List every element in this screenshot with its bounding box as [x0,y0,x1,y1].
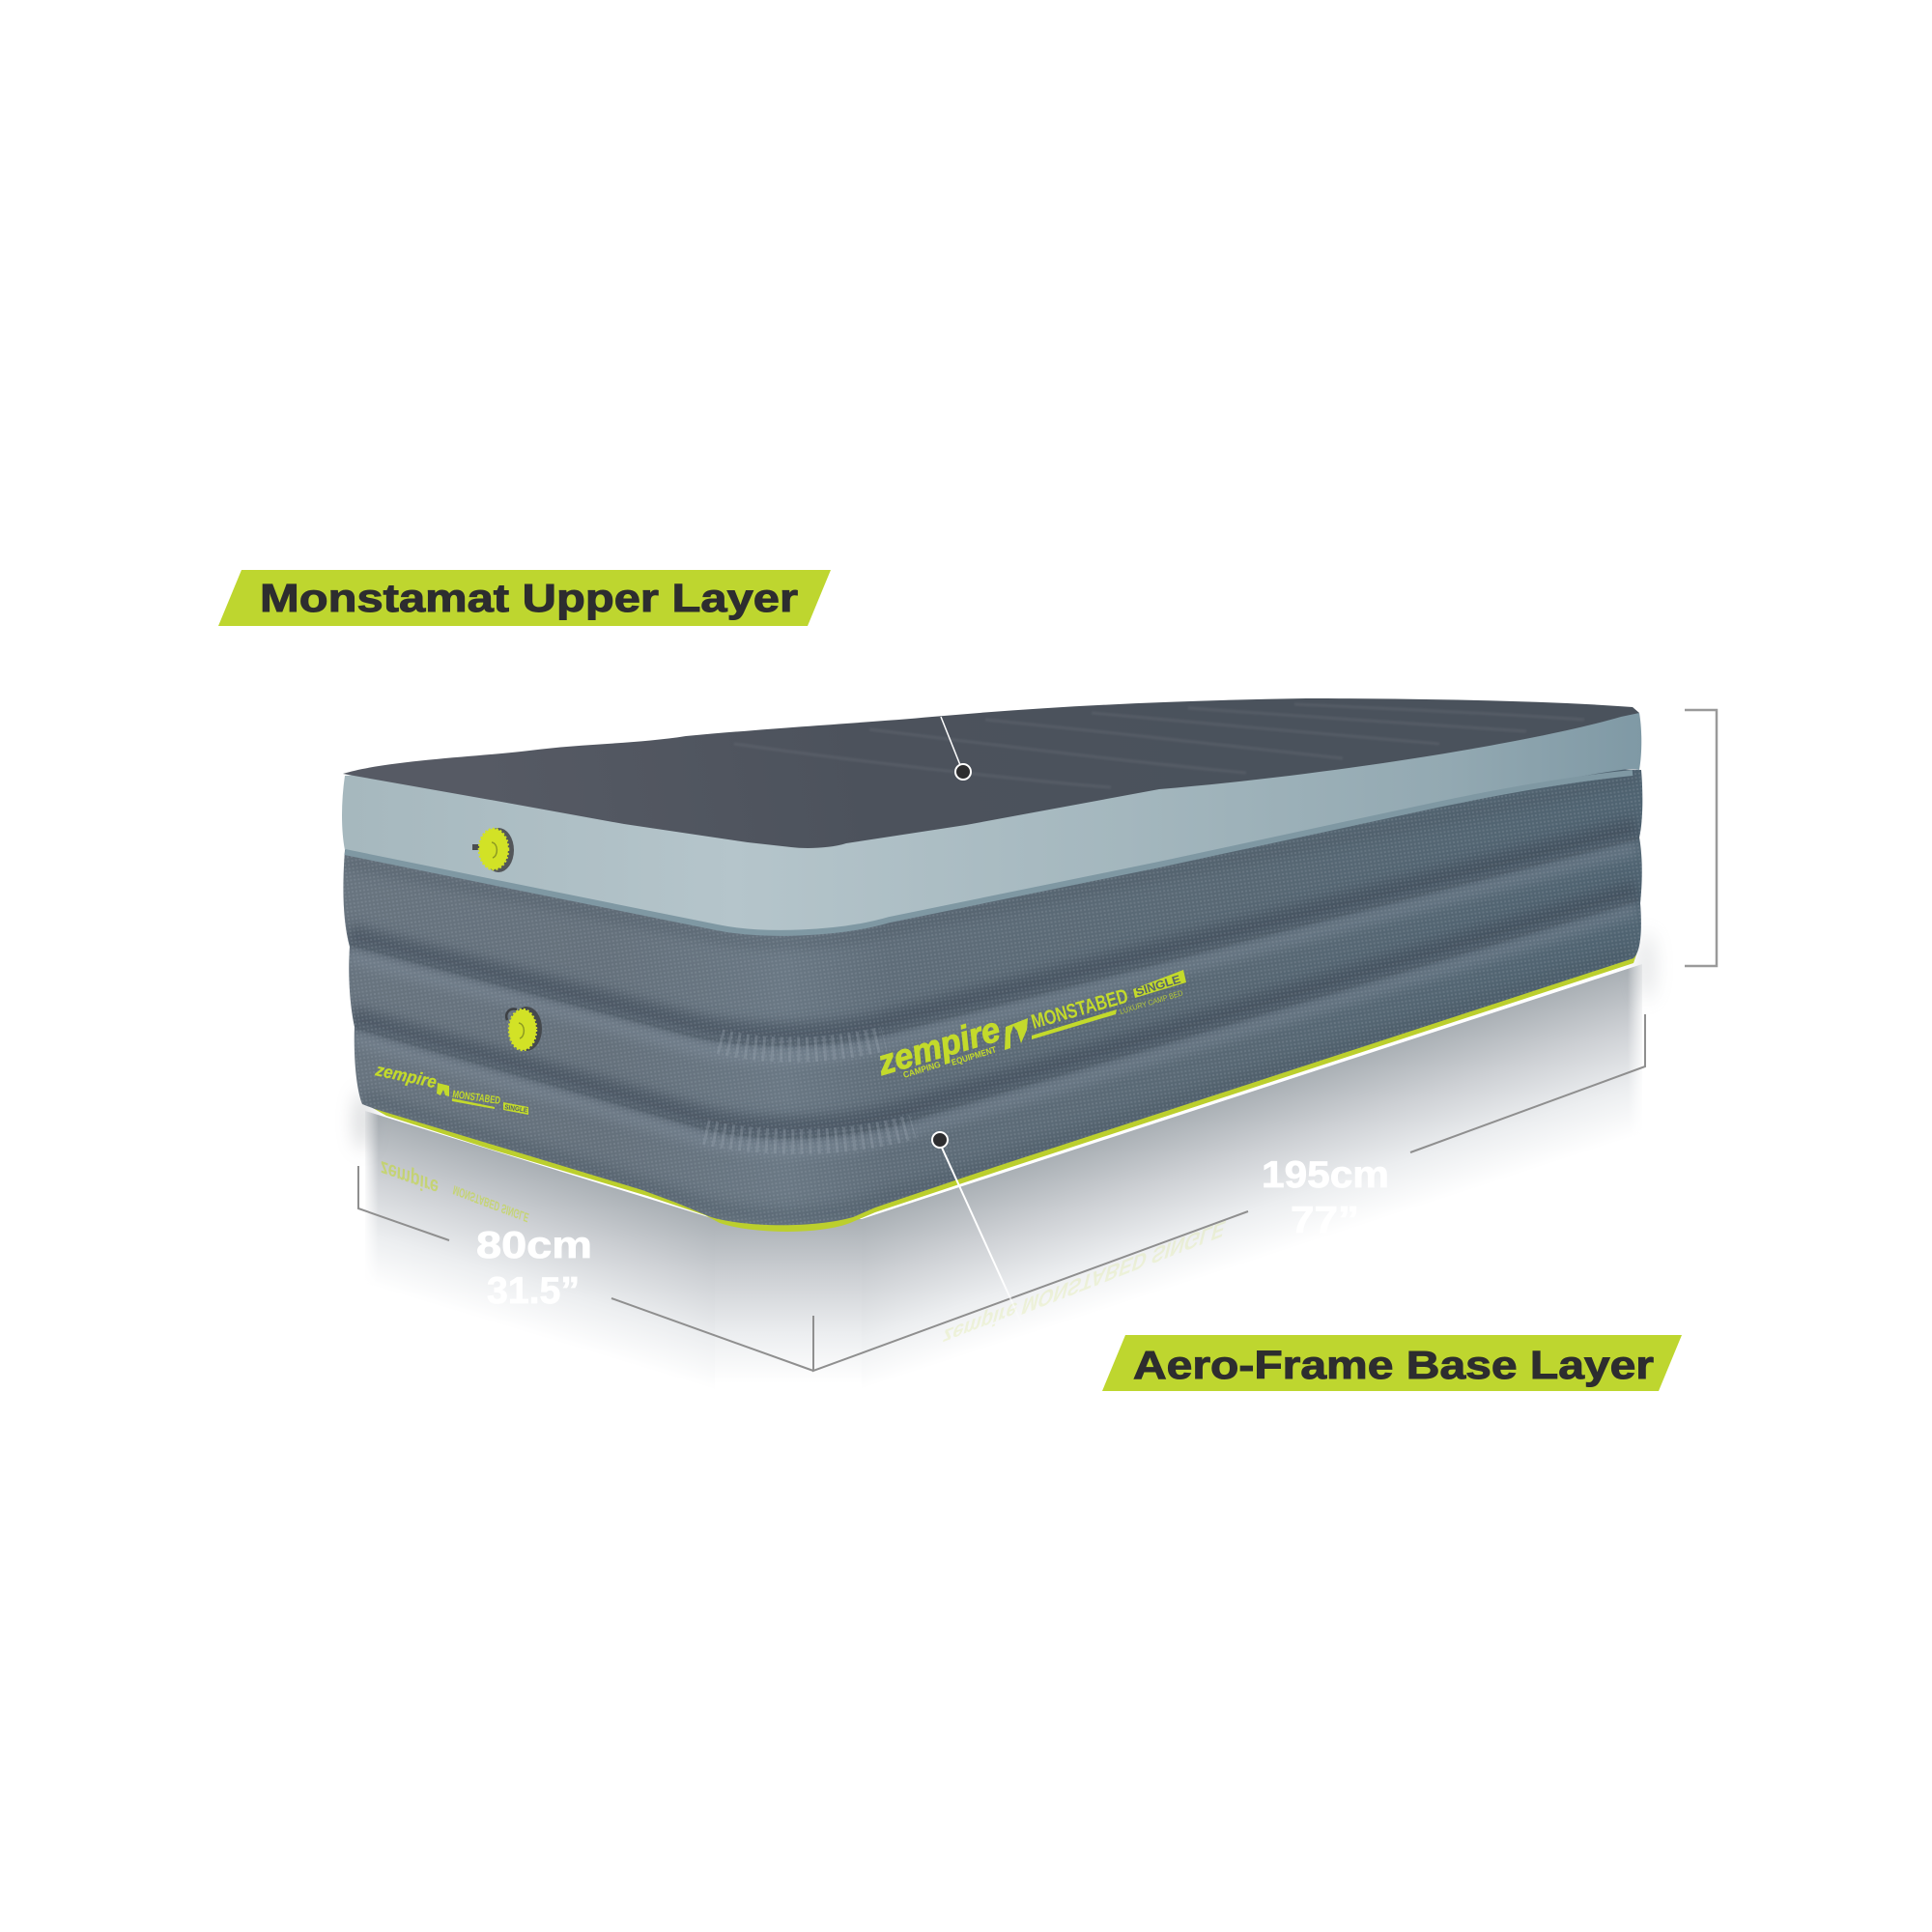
reflected small logo: MONSTABED SINGLE [452,1182,530,1225]
large side logo [872,970,1186,1083]
dimension label: 80cm / 31.5 in: 31.5” [487,1270,580,1312]
band lower lip [345,773,1633,933]
height bracket [1685,710,1717,966]
reflected large logo: zempire MONSTABED SINGLE [940,1214,1228,1350]
upper valve [472,828,514,872]
tier shading [345,779,1638,1216]
monstabed text: MONSTABED [1029,985,1130,1034]
reflected small logo [377,1156,530,1225]
large side logo: EQUIPMENT [951,1044,998,1067]
corner crease wrinkles [705,1038,913,1142]
monstamat top surface [343,698,1639,848]
label: Monstamat Upper Layer [218,570,831,626]
dimension label: 80cm / 31.5 in: 80cm [476,1225,592,1266]
dimension label: 195cm / 77 in: 77” [1291,1200,1359,1241]
dimension label: 195cm / 77 in: 195cm [1262,1154,1389,1196]
luxury camp bed tagline: LUXURY CAMP BED [1119,988,1184,1016]
dimension label: 80cm / 31.5 in [476,1225,592,1312]
reflected small logo: zempire [377,1156,440,1200]
single tag [1133,970,1186,998]
top surface ribs [734,704,1584,787]
callout: base layer leader and dot [932,1132,1024,1328]
label: Aero-Frame Base Layer: Aero-Frame Base Layer [1133,1343,1654,1387]
label: Aero-Frame Base Layer [1102,1335,1682,1391]
flame tent icon [1005,1018,1028,1050]
small end logo: zempire [373,1060,439,1092]
underline bar [1032,1009,1117,1039]
dimension: 195cm length line [813,1014,1645,1371]
dimension label: 195cm / 77 in [1262,1154,1389,1241]
aero-frame mesh base layer [343,769,1642,1225]
callout: upper layer leader and dot [941,717,971,780]
monstamat light side band [342,713,1641,931]
dimension: 80cm width line [358,1166,813,1371]
small end logo [373,1060,528,1115]
air mattress [328,698,1662,1246]
small end logo: SINGLE [504,1104,528,1115]
camping equipment tagline: CAMPING [902,1060,942,1080]
small end logo: MONSTABED [452,1089,501,1107]
lower valve [506,1007,542,1051]
large side logo: SINGLE [1134,972,1182,999]
zempire wordmark: zempire [872,1009,1005,1083]
ground reflection of the mattress [355,932,1654,1401]
mesh texture [344,770,1642,1225]
label: Monstamat Upper Layer: Monstamat Upper Layer [260,576,798,620]
lime base strip [371,952,1637,1232]
